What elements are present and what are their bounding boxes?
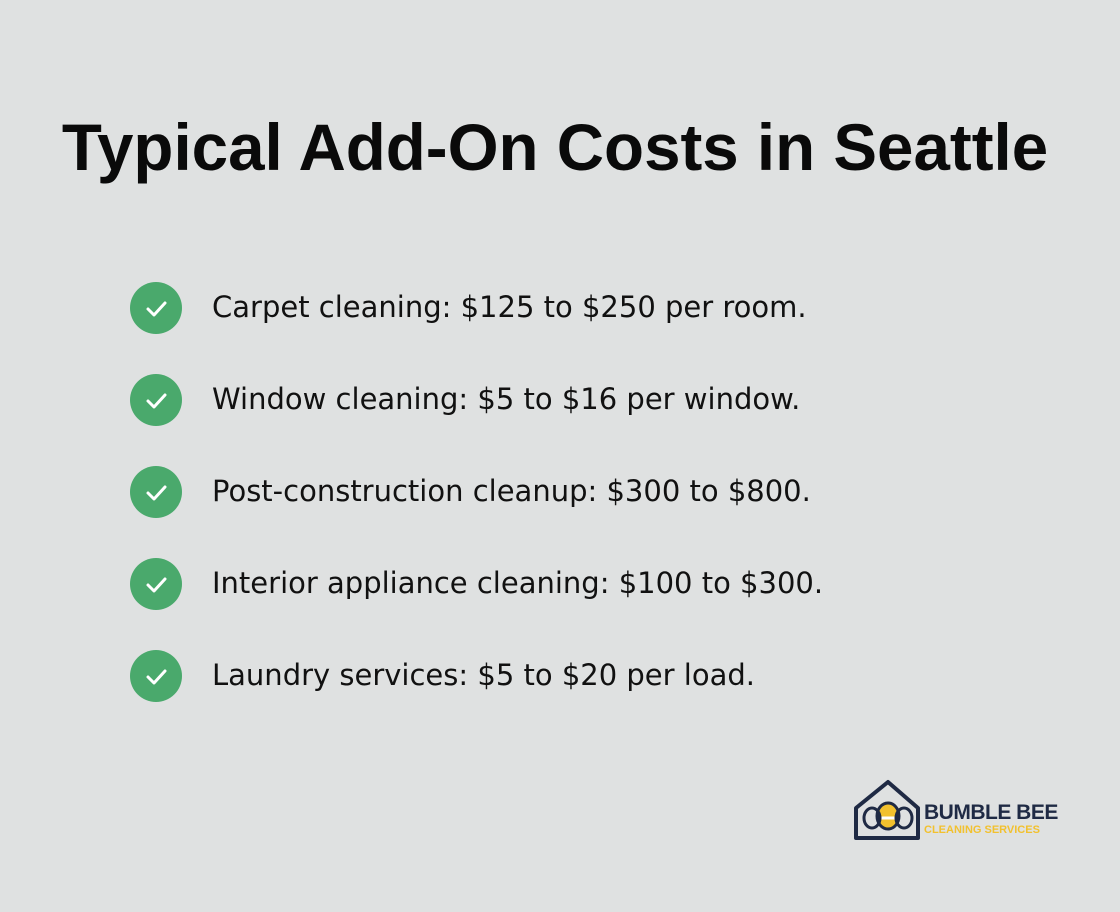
logo — [854, 780, 1058, 840]
item: post-construction — [130, 466, 811, 518]
icon: bee house — [854, 780, 920, 840]
item: window: Window cleaning: $5 to $16 per window. — [212, 382, 800, 416]
logo text: BUMBLE BEE — [924, 801, 1058, 824]
item: laundry — [130, 650, 755, 702]
item: window — [130, 374, 800, 426]
item: appliance — [130, 558, 823, 610]
item: carpet: Carpet cleaning: $125 to $250 per room. — [212, 290, 807, 324]
item: post-construction: Post-construction cleanup: $300 to $800. — [212, 474, 811, 508]
item: laundry: Laundry services: $5 to $20 per load. — [212, 658, 755, 692]
logo: CLEANING SERVICES — [924, 824, 1040, 836]
item: carpet — [130, 282, 807, 334]
item: appliance: Interior appliance cleaning: $100 to $300. — [212, 566, 823, 600]
title: Typical Add-On Costs in Seattle — [62, 111, 1048, 184]
